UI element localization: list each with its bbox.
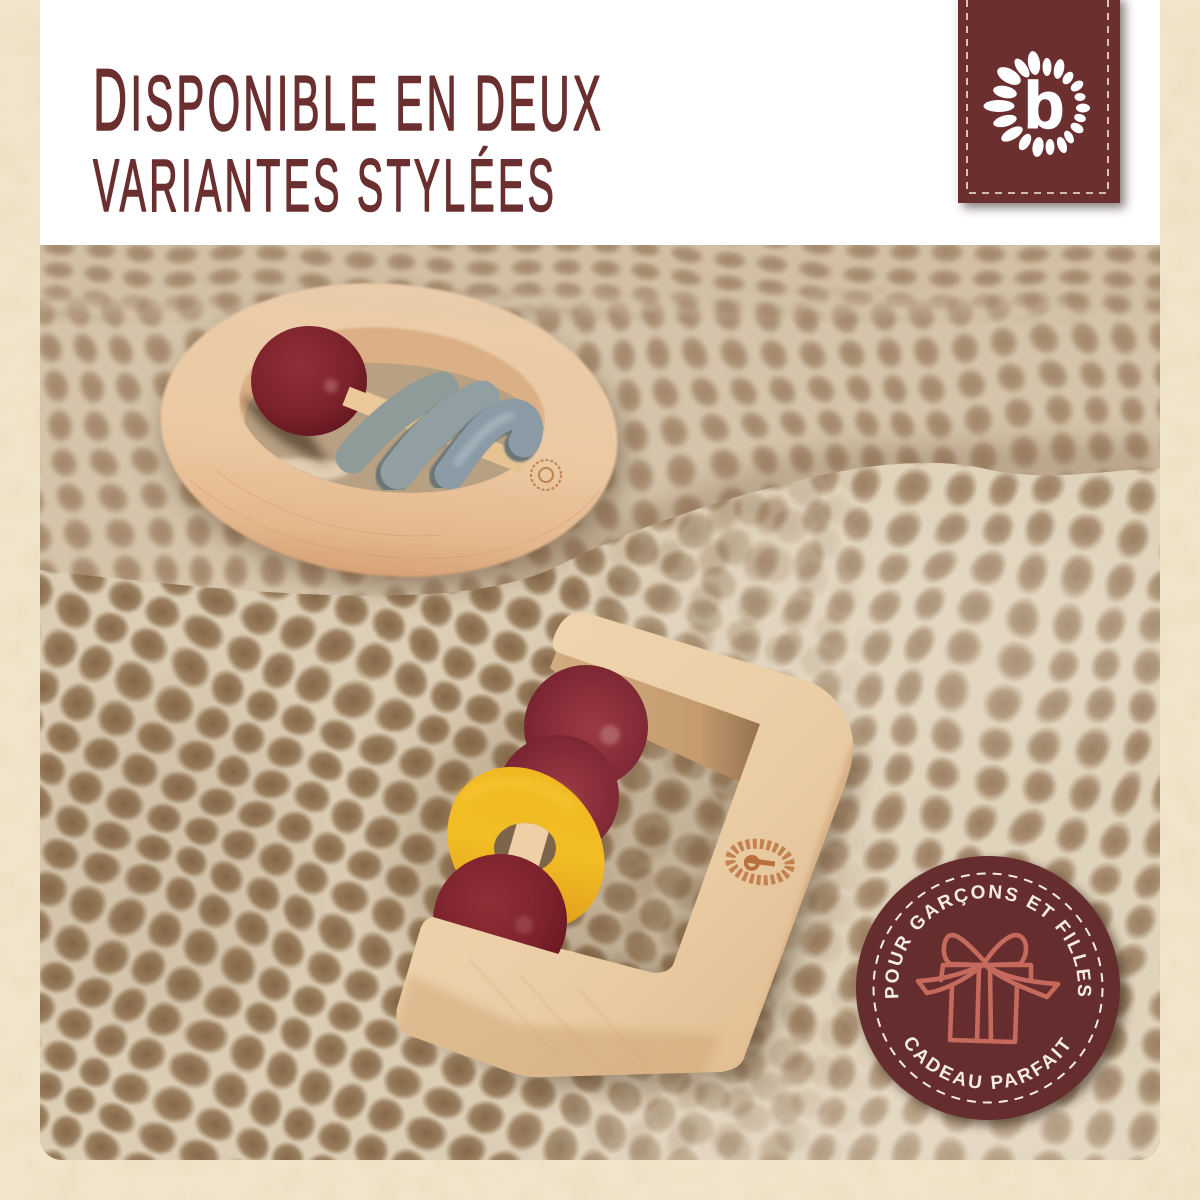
rattle shadow (400, 750, 860, 1088)
icon: sun petals logo (984, 50, 1090, 158)
wooden C frame (396, 612, 853, 1077)
icon: sun petals logo: b (1024, 68, 1064, 142)
red bead (251, 326, 367, 436)
photo panel: waffle blanket with two rattles (40, 245, 1160, 1160)
round badge: gift for boys and girls (854, 853, 1133, 1133)
tag stitching (967, 0, 1108, 193)
ring hole blanket view (240, 362, 544, 493)
badge disc (856, 856, 1120, 1120)
inner top face (550, 650, 763, 783)
icon: gift box (918, 935, 1058, 1042)
blanket shading (10, 530, 1200, 1185)
badge shadow (860, 860, 1126, 1126)
grey disc 2 (398, 398, 482, 472)
bead 2 (497, 735, 619, 857)
burned logo on ring (531, 460, 561, 490)
tag shadow (963, 0, 1125, 208)
grey disc 1 (352, 388, 442, 457)
white header band (40, 0, 1160, 245)
blanket base (40, 1140, 61, 1160)
yellow ring with axle (415, 735, 637, 961)
blanket far blurred band (40, 245, 1160, 320)
wooden axle (348, 395, 525, 464)
round rattle (148, 265, 638, 608)
title: DISPONIBLE EN DEUX (93, 50, 604, 149)
wooden ring (160, 282, 618, 578)
brown brand tag with logo (958, 0, 1125, 208)
title (93, 50, 604, 227)
tag body (958, 0, 1120, 203)
bead 3 highlight (515, 916, 533, 934)
blanket upper waffle texture (40, 292, 1160, 596)
burned sun logo on frame (728, 840, 792, 884)
grey disc 3 shadow (445, 418, 524, 476)
title: VARIANTES STYLÉES (93, 144, 557, 227)
frame shading (390, 745, 856, 1085)
axle top in front of bead (346, 396, 392, 414)
rectangular rattle (390, 612, 860, 1088)
ring shadow (150, 318, 639, 603)
bead 1 (524, 665, 648, 789)
badge stitching ring (874, 874, 1102, 1102)
grey disc 2 shadow (393, 402, 480, 475)
grey disc 3 (450, 414, 528, 474)
blanket lower waffle texture (40, 462, 1160, 1160)
ring hole inner face (239, 326, 546, 485)
blanket fold shadow (500, 440, 1160, 600)
bead 3 (433, 854, 567, 988)
ring grain lines (190, 470, 600, 558)
badge top text: POUR GARÇONS ET FILLES (885, 884, 1092, 998)
badge bottom text: CADEAU PARFAIT (905, 1036, 1070, 1089)
